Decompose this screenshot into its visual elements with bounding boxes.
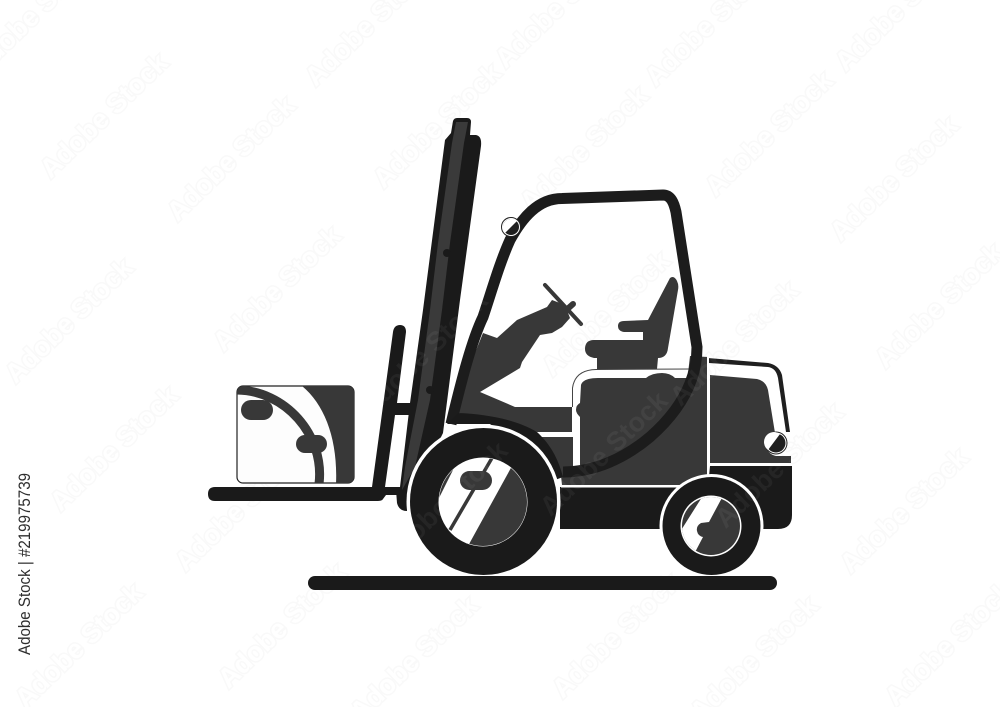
watermark pattern on background: Adobe Stock: [207, 220, 347, 357]
rear wheel: [660, 474, 764, 578]
forklift illustration page: [18, 118, 792, 655]
ground line: [308, 576, 777, 590]
watermark pattern on background: Adobe Stock: [367, 57, 507, 194]
watermark pattern on background: Adobe Stock: [546, 567, 686, 704]
cab roll frame: [451, 195, 697, 472]
watermark overlay on vehicle: [354, 245, 849, 572]
watermark pattern on background: Adobe Stock: [834, 442, 974, 579]
cargo box: [236, 386, 356, 484]
watermark pattern on background: Adobe Stock: [824, 110, 964, 247]
main body panel: [560, 356, 708, 485]
watermark pattern on background: Adobe Stock: [0, 252, 139, 389]
watermark pattern on background: Adobe Stock: [161, 90, 301, 227]
watermark overlay on vehicle: Adobe Stock: [354, 285, 494, 422]
watermark overlay on vehicle: Adobe Stock: [534, 385, 674, 522]
watermark pattern on background: Adobe Stock: [169, 440, 309, 577]
stock id vertical text: Adobe Stock | #219975739: [15, 473, 34, 655]
watermark pattern on background: Adobe Stock: [514, 80, 654, 217]
watermark overlay on vehicle: Adobe Stock: [536, 245, 676, 382]
front wheel: [406, 424, 560, 578]
watermark pattern on background: Adobe Stock: [536, 245, 676, 382]
watermark pattern on background: Adobe Stock: [34, 47, 174, 184]
watermark pattern on background: Adobe Stock: [699, 65, 839, 202]
mast: [396, 118, 481, 511]
watermark pattern on background: Adobe Stock: [44, 380, 184, 517]
front fender: [447, 413, 563, 480]
watermark overlay on vehicle: Adobe Stock: [709, 397, 849, 534]
watermark overlay on vehicle: Adobe Stock: [664, 275, 804, 412]
rear cowl: [560, 356, 792, 529]
watermark pattern on background: Adobe Stock: [212, 557, 352, 694]
driver silhouette: [447, 300, 573, 470]
steering wheel: [545, 285, 581, 324]
cab mirror lamp: [502, 218, 520, 236]
rear lamp: [764, 432, 787, 454]
seat: [585, 277, 678, 369]
watermark overlay on vehicle: Adobe Stock: [374, 435, 514, 572]
fork carriage and blade: [208, 325, 412, 501]
watermark pattern on background: Adobe Stock: [664, 275, 804, 412]
watermark pattern on background: Adobe Stock: [709, 397, 849, 534]
